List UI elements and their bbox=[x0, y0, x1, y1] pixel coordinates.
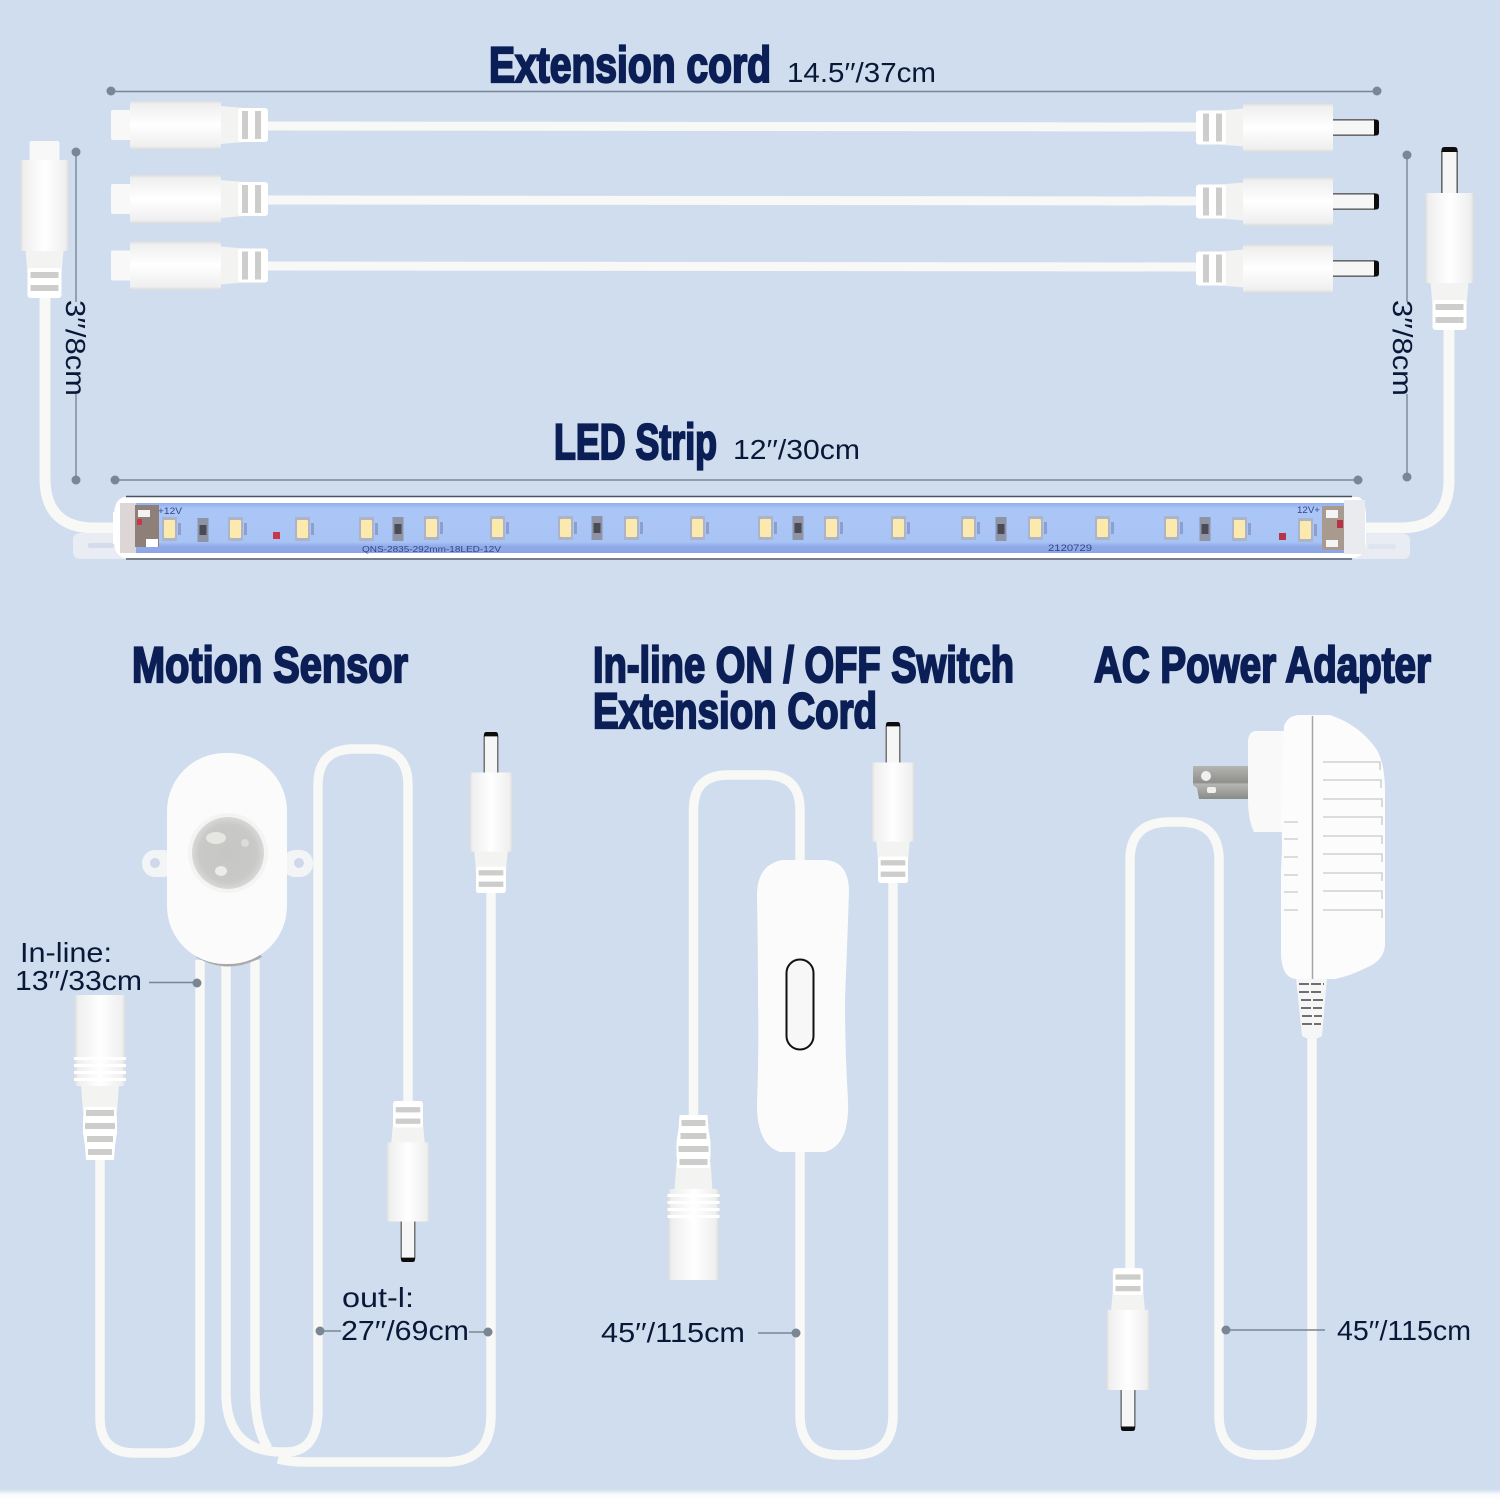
plug block bbox=[1248, 731, 1284, 832]
motion sensor output connector bottom bbox=[386, 1101, 430, 1262]
end caps bbox=[113, 500, 1365, 554]
title: motion sensor: Motion Sensor bbox=[132, 637, 408, 693]
board print: QNS-2835-292mm-18LED-12V bbox=[362, 545, 502, 554]
resistors bbox=[198, 516, 1210, 542]
solder pads bbox=[135, 505, 1344, 550]
label: outlet length: 27′′/69cm bbox=[341, 1315, 469, 1346]
dimension line: inline bbox=[149, 978, 202, 988]
mounting tabs bbox=[73, 533, 1410, 559]
board print: 12V+ bbox=[1297, 505, 1320, 515]
switch cables bbox=[694, 775, 893, 1455]
label: outlet length bbox=[341, 1282, 469, 1346]
AC power adapter bbox=[1193, 715, 1385, 1039]
LED strip bbox=[73, 496, 1410, 559]
strain relief bbox=[1296, 978, 1327, 1039]
label: extension cord length: 14.5′′/37cm bbox=[787, 57, 936, 88]
cord 1 bbox=[111, 100, 1379, 152]
label: left lead length: 3′′/8cm bbox=[60, 300, 91, 396]
label: outlet length: out-l: bbox=[342, 1282, 414, 1313]
inline switch bbox=[757, 860, 849, 1152]
dimension line: right lead bbox=[1402, 150, 1412, 482]
label: inline length: In-line: bbox=[20, 937, 112, 968]
adapter output connector bbox=[1106, 1268, 1150, 1431]
rocker bbox=[786, 960, 814, 1050]
cord 3 bbox=[111, 241, 1379, 293]
left strip lead bbox=[20, 141, 118, 528]
title: LED strip: LED Strip bbox=[554, 414, 717, 470]
board print: 2120729 bbox=[1048, 543, 1092, 553]
label: right lead length: 3′′/8cm bbox=[1387, 300, 1418, 396]
housing bbox=[114, 497, 1366, 558]
sensor base bbox=[196, 952, 262, 966]
motion sensor output connector top bbox=[469, 732, 513, 893]
dimension line: LED strip bbox=[110, 476, 1362, 484]
label: inline length bbox=[15, 937, 142, 996]
label: LED strip length: 12′′/30cm bbox=[733, 434, 860, 465]
dimension line: adapter bbox=[1222, 1326, 1325, 1334]
PIR lens bbox=[188, 813, 268, 893]
extension cords bbox=[111, 100, 1379, 293]
board print: +12V bbox=[158, 506, 182, 516]
circuit board bbox=[122, 503, 1344, 553]
label: switch length: 45′′/115cm bbox=[601, 1317, 745, 1348]
switch input connector bbox=[668, 1115, 720, 1280]
motion sensor input connector bbox=[74, 995, 126, 1160]
left ventilation ribs bbox=[1284, 822, 1298, 910]
housing edge lines bbox=[126, 496, 1352, 559]
right ventilation ribs bbox=[1323, 762, 1382, 918]
title: inline switch: In-line ON / OFF Switch bbox=[593, 637, 1014, 693]
title: inline switch second line: Extension Cord bbox=[593, 683, 877, 739]
motion sensor cables bbox=[100, 749, 491, 1462]
dimension line: extension cord bbox=[106, 86, 1382, 96]
cord 2 bbox=[111, 174, 1379, 226]
board print bbox=[158, 505, 1320, 554]
prongs bbox=[1193, 766, 1249, 799]
dimension line: left lead bbox=[72, 148, 80, 484]
dimension line: outlet bbox=[316, 1326, 492, 1336]
body seam bbox=[1312, 716, 1314, 979]
sensor body bbox=[167, 753, 287, 964]
title: extension cord: Extension cord bbox=[489, 37, 771, 93]
switch output connector bbox=[871, 722, 915, 883]
label: inline length: 13′′/33cm bbox=[15, 965, 142, 996]
switch body bbox=[757, 860, 849, 1152]
LED chips bbox=[162, 516, 1317, 542]
AC adapter cable bbox=[1130, 822, 1312, 1455]
dimension line: switch bbox=[758, 1328, 800, 1338]
mounting ears bbox=[142, 850, 313, 877]
red components bbox=[273, 532, 1286, 540]
bottom white edge bbox=[0, 1489, 1500, 1500]
label: adapter length: 45′′/115cm bbox=[1337, 1315, 1471, 1346]
adapter body bbox=[1281, 715, 1385, 979]
right strip lead bbox=[1365, 147, 1474, 528]
motion sensor unit bbox=[142, 753, 313, 966]
